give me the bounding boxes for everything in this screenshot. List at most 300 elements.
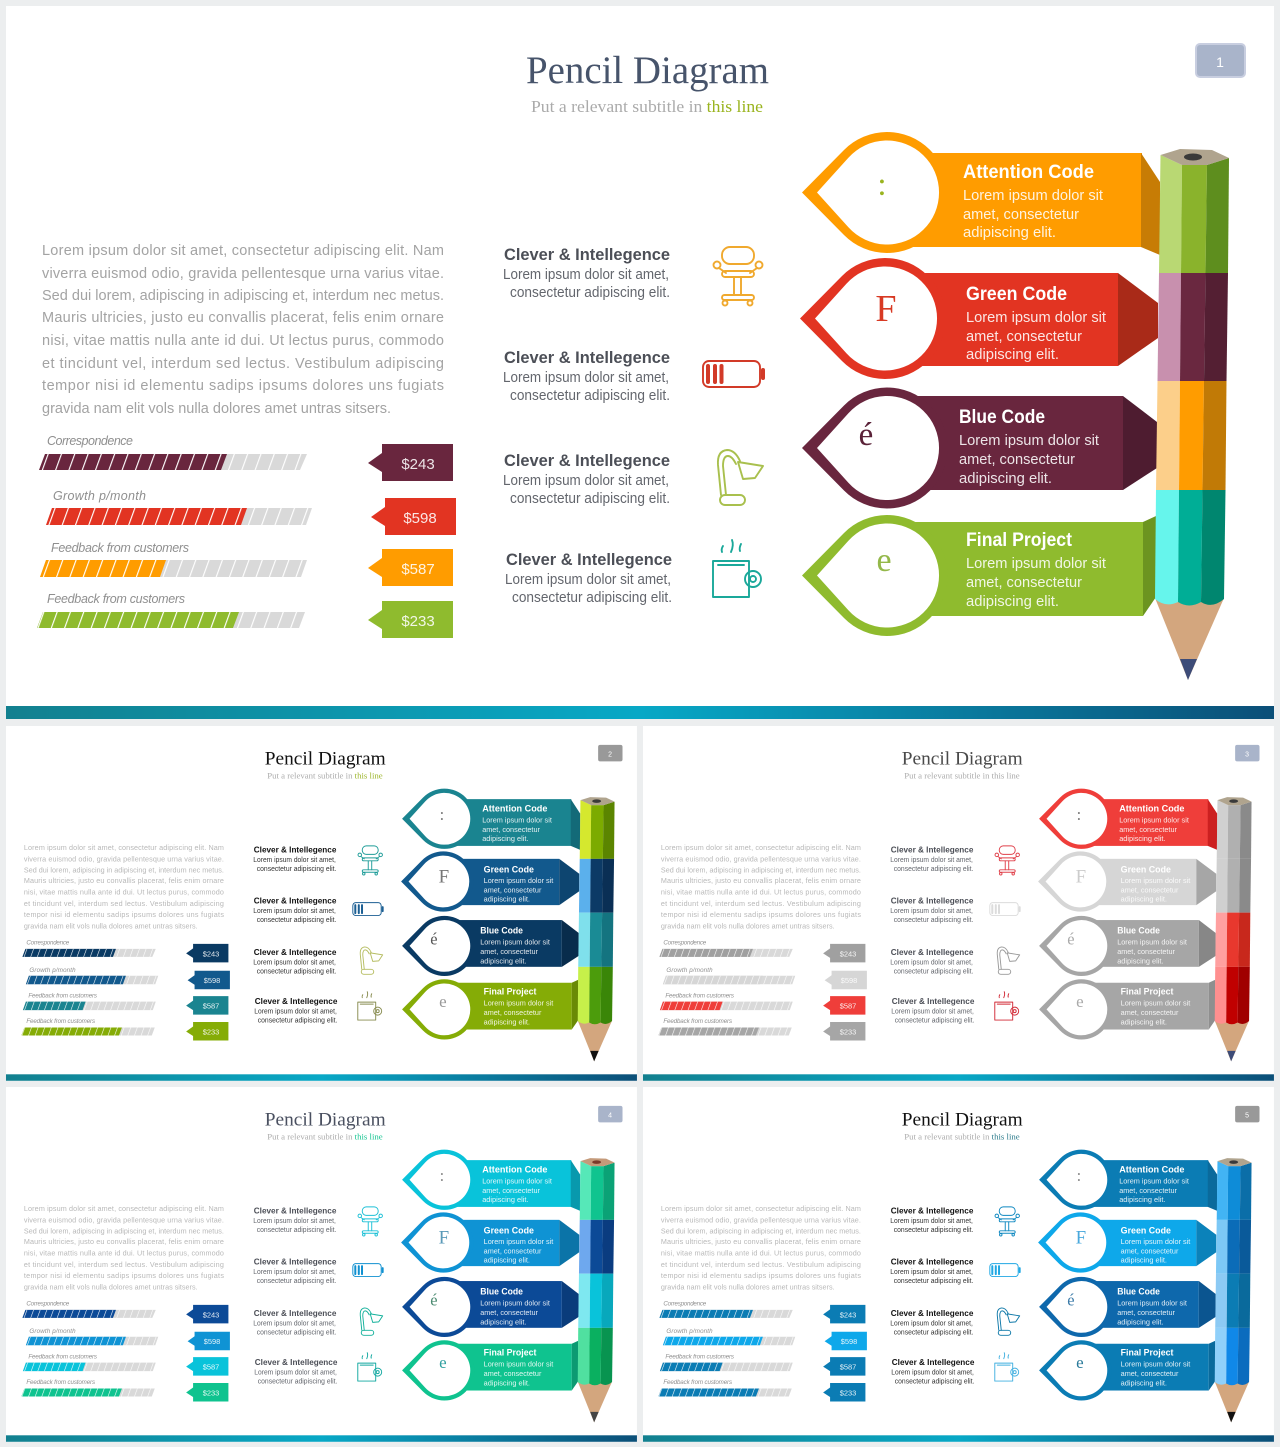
middle text block 1: Clever & Intellegence bbox=[504, 245, 670, 264]
value tag 243 bbox=[368, 444, 453, 481]
progress bar: growth: Growth p/month bbox=[29, 967, 76, 974]
arrow band 3: Lorem ipsum dolor sit bbox=[480, 1298, 551, 1307]
arrow band 4: Final Project bbox=[1121, 987, 1174, 998]
subtitle: Put a relevant subtitle in this line bbox=[531, 97, 763, 116]
body paragraph: et tincidunt vel, interdum sed lectus. Vestibulum adipiscing bbox=[24, 1260, 224, 1269]
arrow band 2: amet, consectetur bbox=[1121, 886, 1179, 895]
progress bar: feedback two: Feedback from customers bbox=[26, 1018, 95, 1025]
value tag 598 bbox=[825, 1332, 867, 1350]
value tag 598 bbox=[188, 971, 230, 989]
middle text block 2: Lorem ipsum dolor sit amet, bbox=[253, 906, 336, 915]
progress bar: feedback one: Feedback from customers bbox=[665, 1354, 734, 1361]
body paragraph: Sed dui lorem, adipiscing in adipiscing et, interdum nec metus. bbox=[661, 865, 861, 874]
value tag 233 bbox=[823, 1383, 865, 1401]
arrow band 2: adipiscing elit. bbox=[1121, 1256, 1167, 1265]
body paragraph: Lorem ipsum dolor sit amet, consectetur adipiscing elit. Nam bbox=[24, 1204, 224, 1213]
middle text block 3: Lorem ipsum dolor sit amet, bbox=[890, 957, 973, 966]
bottom colour bar bbox=[643, 1074, 1274, 1081]
middle text block 2: Clever & Intellegence bbox=[254, 1257, 337, 1267]
middle text block 1: Lorem ipsum dolor sit amet, bbox=[253, 855, 336, 864]
middle text block 3: Lorem ipsum dolor sit amet, bbox=[253, 1318, 336, 1327]
middle text block 3: Clever & Intellegence bbox=[504, 451, 670, 470]
middle text block 4 bbox=[254, 1357, 338, 1386]
value tag 243 bbox=[186, 944, 228, 962]
middle text block 1 bbox=[890, 844, 974, 873]
arrow band 3: Blue Code bbox=[480, 1286, 523, 1297]
body paragraph: nisi, vitae mattis nulla ante id dui. Ut lectus purus, commodo bbox=[24, 888, 224, 897]
middle text block 4: Lorem ipsum dolor sit amet, bbox=[891, 1368, 974, 1377]
small slide: red and grey variant bbox=[643, 726, 1274, 1081]
body paragraph: et tincidunt vel, interdum sed lectus. Vestibulum adipiscing bbox=[24, 899, 224, 908]
bottom colour bar bbox=[6, 1074, 637, 1081]
progress bar: feedback one: Feedback from customers bbox=[28, 993, 97, 1000]
arrow band 4: e bbox=[439, 1353, 447, 1372]
icon: battery bbox=[703, 361, 763, 387]
progress bar: correspondence bbox=[22, 1300, 156, 1318]
arrow band 3: é bbox=[1067, 929, 1075, 948]
middle text block 1: consectetur adipiscing elit. bbox=[257, 1225, 336, 1234]
arrow band 2: F bbox=[1076, 867, 1086, 888]
arrow band 4 bbox=[1039, 1340, 1215, 1400]
arrow band 1 bbox=[402, 789, 580, 850]
middle text block 4 bbox=[505, 550, 672, 606]
icon: battery bbox=[353, 903, 383, 916]
arrow band 3: amet, consectetur bbox=[1117, 1308, 1175, 1317]
middle text block 2: consectetur adipiscing elit. bbox=[257, 1276, 336, 1285]
value tag 243 bbox=[823, 1305, 865, 1323]
arrow band 2: Green Code bbox=[484, 1225, 534, 1236]
arrow band 1: adipiscing elit. bbox=[963, 224, 1056, 241]
progress bar: feedback two bbox=[37, 592, 305, 628]
arrow band 1: Attention Code bbox=[1119, 804, 1184, 815]
body paragraph: nisi, vitae mattis nulla ante id dui. Ut lectus purus, commodo bbox=[24, 1249, 224, 1258]
arrow band 3: adipiscing elit. bbox=[480, 1317, 526, 1326]
arrow band 2: F bbox=[439, 1228, 449, 1249]
body paragraph: nisi, vitae mattis nulla ante id dui. Ut lectus purus, commodo bbox=[661, 1249, 861, 1258]
page number badge bbox=[598, 1106, 623, 1122]
progress bar: feedback two bbox=[21, 1379, 155, 1396]
middle text block 2 bbox=[253, 1257, 337, 1285]
arrow band 3: Lorem ipsum dolor sit bbox=[1117, 1298, 1188, 1307]
progress bar: correspondence: Correspondence bbox=[47, 434, 133, 448]
value tag 233: $233 bbox=[840, 1388, 856, 1397]
arrow band 1: Lorem ipsum dolor sit bbox=[963, 187, 1104, 204]
arrow band 4: amet, consectetur bbox=[1121, 1369, 1179, 1378]
value tag 233 bbox=[186, 1383, 228, 1401]
arrow band 1: adipiscing elit. bbox=[1119, 834, 1165, 843]
value tag 243: $243 bbox=[203, 1310, 219, 1319]
middle text block 3: Lorem ipsum dolor sit amet, bbox=[503, 473, 669, 489]
arrow band 1 bbox=[802, 132, 1160, 255]
title: Pencil Diagram bbox=[526, 49, 769, 92]
arrow band 2: Lorem ipsum dolor sit bbox=[484, 1237, 554, 1246]
value tag 587 bbox=[186, 1357, 228, 1376]
body paragraph: Lorem ipsum dolor sit amet, consectetur adipiscing elit. Nam bbox=[661, 843, 861, 852]
icon: office chair bbox=[995, 1207, 1019, 1236]
progress bar: growth bbox=[663, 1328, 795, 1345]
middle text block 1 bbox=[253, 844, 337, 873]
arrow band 2: adipiscing elit. bbox=[966, 346, 1059, 363]
arrow band 2 bbox=[800, 258, 1158, 379]
middle text block 3: Clever & Intellegence bbox=[254, 947, 337, 957]
pencil bbox=[1155, 149, 1229, 680]
body paragraph: nisi, vitae mattis nulla ante id dui. Ut lectus purus, commodo bbox=[661, 888, 861, 897]
arrow band 4: adipiscing elit. bbox=[484, 1379, 530, 1388]
middle text block 2: Lorem ipsum dolor sit amet, bbox=[890, 1267, 973, 1276]
middle text block 1: Lorem ipsum dolor sit amet, bbox=[890, 855, 973, 864]
middle text block 4: Clever & Intellegence bbox=[255, 996, 338, 1006]
middle text block 2 bbox=[890, 896, 974, 924]
body paragraph: gravida nam elit vols nulla dolores amet untras sitsers. bbox=[42, 401, 391, 417]
value tag 587 bbox=[823, 1357, 865, 1376]
page number badge: 3 bbox=[1245, 751, 1249, 758]
middle text block 1 bbox=[890, 1205, 974, 1234]
middle text block 4 bbox=[891, 996, 975, 1025]
value tag 233 bbox=[368, 601, 453, 638]
progress bar: growth: Growth p/month bbox=[666, 1328, 713, 1335]
progress bar: growth bbox=[46, 489, 312, 525]
middle text block 1: consectetur adipiscing elit. bbox=[257, 864, 336, 873]
middle text block 1: Lorem ipsum dolor sit amet, bbox=[890, 1216, 973, 1225]
arrow band 2: Lorem ipsum dolor sit bbox=[484, 876, 554, 885]
middle text block 1 bbox=[503, 245, 670, 301]
arrow band 2: adipiscing elit. bbox=[484, 895, 530, 904]
title: Pencil Diagram bbox=[265, 1109, 386, 1130]
middle text block 3: Clever & Intellegence bbox=[254, 1308, 337, 1318]
page number badge bbox=[598, 745, 623, 761]
progress bar: growth bbox=[26, 1328, 158, 1345]
body paragraph: viverra euismod odio, gravida pellentesque urna varius vitae. bbox=[42, 266, 444, 282]
icon: battery bbox=[353, 1264, 383, 1277]
arrow band 3: é bbox=[430, 929, 438, 948]
arrow band 3: amet, consectetur bbox=[1117, 947, 1175, 956]
middle text block 4: Clever & Intellegence bbox=[892, 1357, 975, 1367]
arrow band 3: Blue Code bbox=[480, 925, 523, 936]
arrow band 1: amet, consectetur bbox=[963, 206, 1079, 223]
pencil bbox=[578, 1158, 615, 1422]
arrow band 4: adipiscing elit. bbox=[966, 593, 1059, 610]
arrow band 4 bbox=[402, 979, 578, 1039]
page number badge bbox=[1196, 44, 1245, 77]
arrow band 2: Green Code bbox=[1121, 864, 1171, 875]
value tag 598 bbox=[371, 498, 456, 535]
middle text block 4: consectetur adipiscing elit. bbox=[258, 1016, 337, 1025]
arrow band 4 bbox=[1039, 979, 1215, 1039]
arrow band 2 bbox=[401, 851, 579, 912]
middle text block 1: consectetur adipiscing elit. bbox=[894, 1225, 973, 1234]
arrow band 3: é bbox=[859, 417, 873, 453]
arrow band 1: amet, consectetur bbox=[482, 825, 540, 834]
pencil bbox=[578, 797, 615, 1061]
middle text block 4: consectetur adipiscing elit. bbox=[895, 1377, 974, 1386]
body paragraph: nisi, vitae mattis nulla ante id dui. Ut lectus purus, commodo bbox=[42, 333, 444, 349]
value tag 243: $243 bbox=[840, 1310, 856, 1319]
body paragraph: Sed dui lorem, adipiscing in adipiscing et, interdum nec metus. bbox=[24, 1226, 224, 1235]
middle text block 2: consectetur adipiscing elit. bbox=[894, 915, 973, 924]
small slide: blue variant bbox=[643, 1087, 1274, 1442]
arrow band 4: Final Project bbox=[484, 1348, 537, 1359]
subtitle: Put a relevant subtitle in this line bbox=[904, 1132, 1020, 1142]
arrow band 4: Final Project bbox=[1121, 1348, 1174, 1359]
title: Pencil Diagram bbox=[265, 748, 386, 769]
middle text block 4 bbox=[891, 1357, 975, 1386]
icon: desk lamp bbox=[997, 947, 1020, 974]
arrow band 3 bbox=[402, 1277, 579, 1337]
arrow band 1: adipiscing elit. bbox=[1119, 1195, 1165, 1204]
progress bar: feedback one bbox=[660, 1354, 793, 1371]
value tag 598: $598 bbox=[841, 976, 857, 985]
arrow band 4: adipiscing elit. bbox=[1121, 1018, 1167, 1027]
arrow band 2: F bbox=[439, 867, 449, 888]
arrow band 1: : bbox=[1077, 805, 1081, 824]
pencil bbox=[1215, 797, 1252, 1061]
arrow band 2: adipiscing elit. bbox=[484, 1256, 530, 1265]
body paragraph bbox=[42, 243, 444, 417]
bottom colour bar bbox=[6, 706, 1274, 719]
arrow band 2: Lorem ipsum dolor sit bbox=[1121, 876, 1191, 885]
progress bar: growth: Growth p/month bbox=[29, 1328, 76, 1335]
arrow band 3: adipiscing elit. bbox=[1117, 1317, 1163, 1326]
icon: coffee mug bbox=[713, 540, 761, 597]
arrow band 1: Lorem ipsum dolor sit bbox=[1119, 816, 1190, 825]
arrow band 3: amet, consectetur bbox=[480, 1308, 538, 1317]
body paragraph: viverra euismod odio, gravida pellentesque urna varius vitae. bbox=[24, 1215, 224, 1224]
progress bar: growth: Growth p/month bbox=[666, 967, 713, 974]
middle text block 1: Clever & Intellegence bbox=[891, 844, 974, 854]
progress bar: feedback one bbox=[23, 993, 156, 1010]
body paragraph: Sed dui lorem, adipiscing in adipiscing et, interdum nec metus. bbox=[661, 1226, 861, 1235]
arrow band 2: amet, consectetur bbox=[966, 328, 1082, 345]
icon: battery bbox=[990, 1264, 1020, 1277]
value tag 233: $233 bbox=[840, 1027, 856, 1036]
middle text block 3: Clever & Intellegence bbox=[891, 947, 974, 957]
arrow band 2: adipiscing elit. bbox=[1121, 895, 1167, 904]
body paragraph bbox=[24, 843, 224, 931]
body paragraph: gravida nam elit vols nulla dolores amet untras sitsers. bbox=[24, 922, 198, 931]
progress bar: feedback one: Feedback from customers bbox=[28, 1354, 97, 1361]
value tag 598: $598 bbox=[403, 510, 437, 527]
middle text block 2: consectetur adipiscing elit. bbox=[894, 1276, 973, 1285]
icon: office chair bbox=[358, 846, 382, 875]
middle text block 3: consectetur adipiscing elit. bbox=[510, 491, 670, 507]
progress bar: correspondence: Correspondence bbox=[26, 1300, 70, 1307]
arrow band 4: Lorem ipsum dolor sit bbox=[966, 555, 1107, 572]
arrow band 3: Lorem ipsum dolor sit bbox=[1117, 937, 1188, 946]
body paragraph: tempor nisi id elementu sadips ipsums dolores uns fugiats bbox=[24, 1271, 224, 1280]
small slide: cyan and mint variant bbox=[6, 1087, 637, 1442]
progress bar: feedback one: Feedback from customers bbox=[665, 993, 734, 1000]
value tag 587 bbox=[186, 996, 228, 1015]
page number badge bbox=[1235, 1106, 1260, 1122]
arrow band 4: adipiscing elit. bbox=[1121, 1379, 1167, 1388]
arrow band 2: amet, consectetur bbox=[484, 886, 542, 895]
arrow band 4: Lorem ipsum dolor sit bbox=[484, 999, 554, 1008]
middle text block 2: Clever & Intellegence bbox=[254, 896, 337, 906]
arrow band 2: F bbox=[875, 288, 897, 330]
arrow band 3: Blue Code bbox=[959, 407, 1045, 428]
arrow band 3: adipiscing elit. bbox=[1117, 956, 1163, 965]
value tag 587 bbox=[368, 549, 453, 586]
value tag 243 bbox=[186, 1305, 228, 1323]
small slide: teal and lime variant bbox=[6, 726, 637, 1081]
value tag 233 bbox=[186, 1022, 228, 1040]
body paragraph: viverra euismod odio, gravida pellentesque urna varius vitae. bbox=[661, 1215, 861, 1224]
progress bar: feedback one bbox=[40, 541, 307, 577]
middle text block 4: consectetur adipiscing elit. bbox=[258, 1377, 337, 1386]
body paragraph: Sed dui lorem, adipiscing in adipiscing et, interdum nec metus. bbox=[24, 865, 224, 874]
arrow band 1: Lorem ipsum dolor sit bbox=[482, 1177, 553, 1186]
body paragraph bbox=[661, 1204, 861, 1292]
page number badge: 4 bbox=[608, 1112, 612, 1119]
arrow band 1: : bbox=[1077, 1166, 1081, 1185]
arrow band 4: e bbox=[876, 542, 892, 579]
body paragraph: viverra euismod odio, gravida pellentesque urna varius vitae. bbox=[24, 854, 224, 863]
value tag 243 bbox=[823, 944, 865, 962]
arrow band 3 bbox=[402, 916, 579, 976]
middle text block 4: Lorem ipsum dolor sit amet, bbox=[505, 572, 671, 588]
body paragraph: gravida nam elit vols nulla dolores amet untras sitsers. bbox=[24, 1283, 198, 1292]
arrow band 2 bbox=[1038, 1212, 1216, 1273]
pencil bbox=[1215, 1158, 1252, 1422]
value tag 587 bbox=[823, 996, 865, 1015]
value tag 598 bbox=[188, 1332, 230, 1350]
middle text block 4: Lorem ipsum dolor sit amet, bbox=[254, 1368, 337, 1377]
arrow band 2: Lorem ipsum dolor sit bbox=[966, 309, 1107, 326]
arrow band 3 bbox=[1039, 1277, 1216, 1337]
body paragraph: tempor nisi id elementu sadips ipsums dolores uns fugiats bbox=[42, 378, 444, 394]
arrow band 2 bbox=[401, 1212, 579, 1273]
body paragraph: Mauris ultricies, justo eu convallis placerat, felis enim ornare bbox=[24, 1237, 224, 1246]
body paragraph: Lorem ipsum dolor sit amet, consectetur adipiscing elit. Nam bbox=[24, 843, 224, 852]
arrow band 1: amet, consectetur bbox=[482, 1186, 540, 1195]
middle text block 3: Lorem ipsum dolor sit amet, bbox=[890, 1318, 973, 1327]
value tag 598: $598 bbox=[204, 1337, 220, 1346]
progress bar: correspondence: Correspondence bbox=[663, 1300, 707, 1307]
icon: desk lamp bbox=[360, 1308, 383, 1335]
arrow band 3: amet, consectetur bbox=[480, 947, 538, 956]
middle text block 2: Lorem ipsum dolor sit amet, bbox=[253, 1267, 336, 1276]
value tag 598 bbox=[825, 971, 867, 989]
icon: coffee mug bbox=[995, 992, 1019, 1020]
middle text block 3: Clever & Intellegence bbox=[891, 1308, 974, 1318]
page number badge bbox=[1235, 745, 1260, 761]
page number badge: 5 bbox=[1245, 1112, 1249, 1119]
arrow band 1: adipiscing elit. bbox=[482, 1195, 528, 1204]
body paragraph: et tincidunt vel, interdum sed lectus. Vestibulum adipiscing bbox=[661, 1260, 861, 1269]
arrow band 4: Lorem ipsum dolor sit bbox=[1121, 999, 1191, 1008]
middle text block 2 bbox=[503, 348, 670, 404]
progress bar: correspondence bbox=[22, 939, 156, 957]
progress bar: feedback one: Feedback from customers bbox=[51, 541, 189, 555]
middle text block 2: Lorem ipsum dolor sit amet, bbox=[890, 906, 973, 915]
arrow band 1: Attention Code bbox=[1119, 1165, 1184, 1176]
icon: coffee mug bbox=[358, 1353, 382, 1381]
subtitle: Put a relevant subtitle in this line bbox=[904, 771, 1020, 781]
middle text block 2: Lorem ipsum dolor sit amet, bbox=[503, 370, 669, 386]
value tag 587: $587 bbox=[203, 1002, 219, 1011]
arrow band 2: F bbox=[1076, 1228, 1086, 1249]
arrow band 1: Lorem ipsum dolor sit bbox=[482, 816, 553, 825]
middle text block 3 bbox=[890, 1308, 974, 1336]
middle text block 4: Lorem ipsum dolor sit amet, bbox=[254, 1007, 337, 1016]
progress bar: feedback two: Feedback from customers bbox=[663, 1018, 732, 1025]
value tag 233: $233 bbox=[203, 1388, 219, 1397]
middle text block 1: Lorem ipsum dolor sit amet, bbox=[253, 1216, 336, 1225]
arrow band 4: Final Project bbox=[966, 530, 1073, 551]
bottom colour bar bbox=[643, 1435, 1274, 1442]
subtitle: Put a relevant subtitle in this line bbox=[267, 771, 383, 781]
progress bar: correspondence bbox=[659, 1300, 793, 1318]
arrow band 3: Lorem ipsum dolor sit bbox=[480, 937, 551, 946]
arrow band 3 bbox=[802, 388, 1157, 508]
middle text block 1: Lorem ipsum dolor sit amet, bbox=[503, 267, 669, 283]
body paragraph: et tincidunt vel, interdum sed lectus. Vestibulum adipiscing bbox=[42, 356, 444, 372]
value tag 243: $243 bbox=[840, 949, 856, 958]
middle text block 2: Clever & Intellegence bbox=[891, 896, 974, 906]
arrow band 1 bbox=[402, 1150, 580, 1211]
body paragraph: viverra euismod odio, gravida pellentesque urna varius vitae. bbox=[661, 854, 861, 863]
progress bar: growth: Growth p/month bbox=[53, 489, 146, 503]
arrow band 3 bbox=[1039, 916, 1216, 976]
arrow band 4 bbox=[402, 1340, 578, 1400]
progress bar: feedback one bbox=[660, 993, 793, 1010]
arrow band 3: Blue Code bbox=[1117, 925, 1160, 936]
arrow band 4: Lorem ipsum dolor sit bbox=[1121, 1360, 1191, 1369]
progress bar: correspondence bbox=[39, 434, 307, 470]
body paragraph: tempor nisi id elementu sadips ipsums dolores uns fugiats bbox=[661, 910, 861, 919]
body paragraph: Mauris ultricies, justo eu convallis placerat, felis enim ornare bbox=[661, 1237, 861, 1246]
arrow band 4: e bbox=[1076, 1353, 1084, 1372]
body paragraph bbox=[24, 1204, 224, 1292]
value tag 587: $587 bbox=[840, 1002, 856, 1011]
arrow band 2: Lorem ipsum dolor sit bbox=[1121, 1237, 1191, 1246]
middle text block 4: Clever & Intellegence bbox=[892, 996, 975, 1006]
arrow band 4: e bbox=[439, 992, 447, 1011]
arrow band 3: Blue Code bbox=[1117, 1286, 1160, 1297]
progress bar: feedback one bbox=[23, 1354, 156, 1371]
middle text block 1: consectetur adipiscing elit. bbox=[510, 285, 670, 301]
icon: office chair bbox=[995, 846, 1019, 875]
middle text block 4: consectetur adipiscing elit. bbox=[895, 1016, 974, 1025]
arrow band 1: Attention Code bbox=[482, 804, 547, 815]
body paragraph: tempor nisi id elementu sadips ipsums dolores uns fugiats bbox=[661, 1271, 861, 1280]
bottom colour bar bbox=[6, 1435, 637, 1442]
arrow band 4: amet, consectetur bbox=[484, 1369, 542, 1378]
body paragraph bbox=[661, 843, 861, 931]
title: Pencil Diagram bbox=[902, 748, 1023, 769]
middle text block 3: consectetur adipiscing elit. bbox=[894, 1327, 973, 1336]
progress bar: feedback two: Feedback from customers bbox=[26, 1379, 95, 1386]
arrow band 1 bbox=[1039, 789, 1217, 850]
body paragraph: Mauris ultricies, justo eu convallis placerat, felis enim ornare bbox=[42, 310, 444, 326]
arrow band 4 bbox=[802, 515, 1156, 636]
middle text block 2: consectetur adipiscing elit. bbox=[257, 915, 336, 924]
icon: desk lamp bbox=[718, 450, 763, 505]
body paragraph: Mauris ultricies, justo eu convallis placerat, felis enim ornare bbox=[661, 876, 861, 885]
middle text block 3 bbox=[890, 947, 974, 975]
body paragraph: Lorem ipsum dolor sit amet, consectetur adipiscing elit. Nam bbox=[661, 1204, 861, 1213]
page number badge: 1 bbox=[1216, 54, 1224, 70]
body paragraph: gravida nam elit vols nulla dolores amet untras sitsers. bbox=[661, 1283, 835, 1292]
arrow band 4: amet, consectetur bbox=[1121, 1008, 1179, 1017]
middle text block 4: Lorem ipsum dolor sit amet, bbox=[891, 1007, 974, 1016]
progress bar: growth bbox=[26, 967, 158, 984]
value tag 233 bbox=[823, 1022, 865, 1040]
arrow band 1: adipiscing elit. bbox=[482, 834, 528, 843]
middle text block 2 bbox=[890, 1257, 974, 1285]
progress bar: feedback two bbox=[21, 1018, 155, 1035]
arrow band 4: e bbox=[1076, 992, 1084, 1011]
